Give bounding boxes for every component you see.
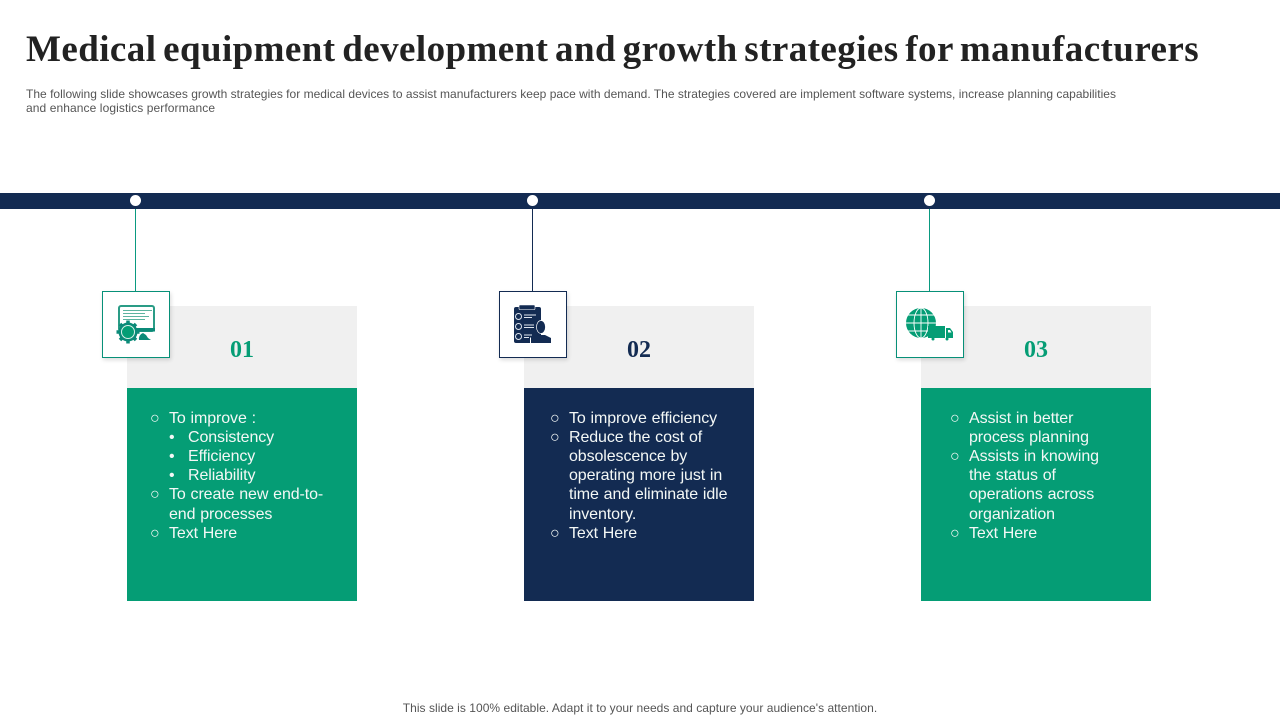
- list 01: [150, 410, 323, 542]
- list 03: ○: [950, 525, 960, 542]
- number 01: 01: [230, 337, 254, 363]
- list 03: [950, 410, 1099, 542]
- number header 03: [921, 306, 1151, 388]
- panel: step 03: [921, 306, 1151, 601]
- list 03: Assists in knowing: [969, 448, 1099, 465]
- list 01: •: [169, 429, 175, 446]
- connector 3: [929, 209, 930, 291]
- number 02: 02: [627, 337, 651, 363]
- list 02: To improve efficiency: [569, 410, 717, 427]
- list 03: process planning: [969, 429, 1089, 446]
- panel: step 01: [127, 306, 357, 601]
- list 01: ○: [150, 410, 160, 427]
- list 01: To improve :: [169, 410, 256, 427]
- list 01: •: [169, 467, 175, 484]
- list 01: Text Here: [169, 525, 237, 542]
- connector 1: [135, 209, 136, 291]
- icon: globe with truck: [896, 291, 964, 358]
- subtitle description: and enhance logistics performance: [26, 101, 215, 115]
- timeline dot 2: [527, 195, 538, 206]
- list 01: Reliability: [188, 467, 255, 484]
- list 03: Assist in better: [969, 410, 1073, 427]
- list 03: operations across: [969, 486, 1094, 503]
- list 02: ○: [550, 525, 560, 542]
- list 01: end processes: [169, 506, 272, 523]
- body 01: [127, 388, 357, 601]
- number header 02: [524, 306, 754, 388]
- panel: step 02: [524, 306, 754, 601]
- icon: software system gear: [102, 291, 170, 358]
- list 01: Efficiency: [188, 448, 255, 465]
- subtitle description: The following slide showcases growth strategies for medical devices to assist manufacturers keep pace with demand. The strategies covered are implement software systems, increase planning capabilities: [26, 87, 1116, 101]
- list 02: inventory.: [569, 506, 636, 523]
- list 02: Text Here: [569, 525, 637, 542]
- icon: clipboard with person: [499, 291, 567, 358]
- list 01: •: [169, 448, 175, 465]
- list 03: ○: [950, 410, 960, 427]
- list 03: Text Here: [969, 525, 1037, 542]
- list 02: operating more just in: [569, 467, 722, 484]
- list 02: time and eliminate idle: [569, 486, 727, 503]
- list 02: Reduce the cost of: [569, 429, 702, 446]
- footer note: This slide is 100% editable. Adapt it to your needs and capture your audience's attention.: [403, 701, 877, 715]
- title: Medical equipment development and growth strategies for manufacturers: [26, 29, 1199, 70]
- list 02: ○: [550, 429, 560, 446]
- timeline dot 3: [924, 195, 935, 206]
- list 02: ○: [550, 410, 560, 427]
- list 01: ○: [150, 525, 160, 542]
- list 03: ○: [950, 448, 960, 465]
- list 01: ○: [150, 486, 160, 503]
- number header 01: [127, 306, 357, 388]
- timeline bar: [0, 193, 1280, 209]
- number 03: 03: [1024, 337, 1048, 363]
- list 03: the status of: [969, 467, 1056, 484]
- timeline dot 1: [130, 195, 141, 206]
- subtitle description: [26, 87, 1116, 115]
- connector 2: [532, 209, 533, 291]
- list 01: To create new end-to-: [169, 486, 323, 503]
- list 01: Consistency: [188, 429, 274, 446]
- list 02: [550, 410, 727, 542]
- list 02: obsolescence by: [569, 448, 687, 465]
- list 03: organization: [969, 506, 1055, 523]
- body 02: [524, 388, 754, 601]
- body 03: [921, 388, 1151, 601]
